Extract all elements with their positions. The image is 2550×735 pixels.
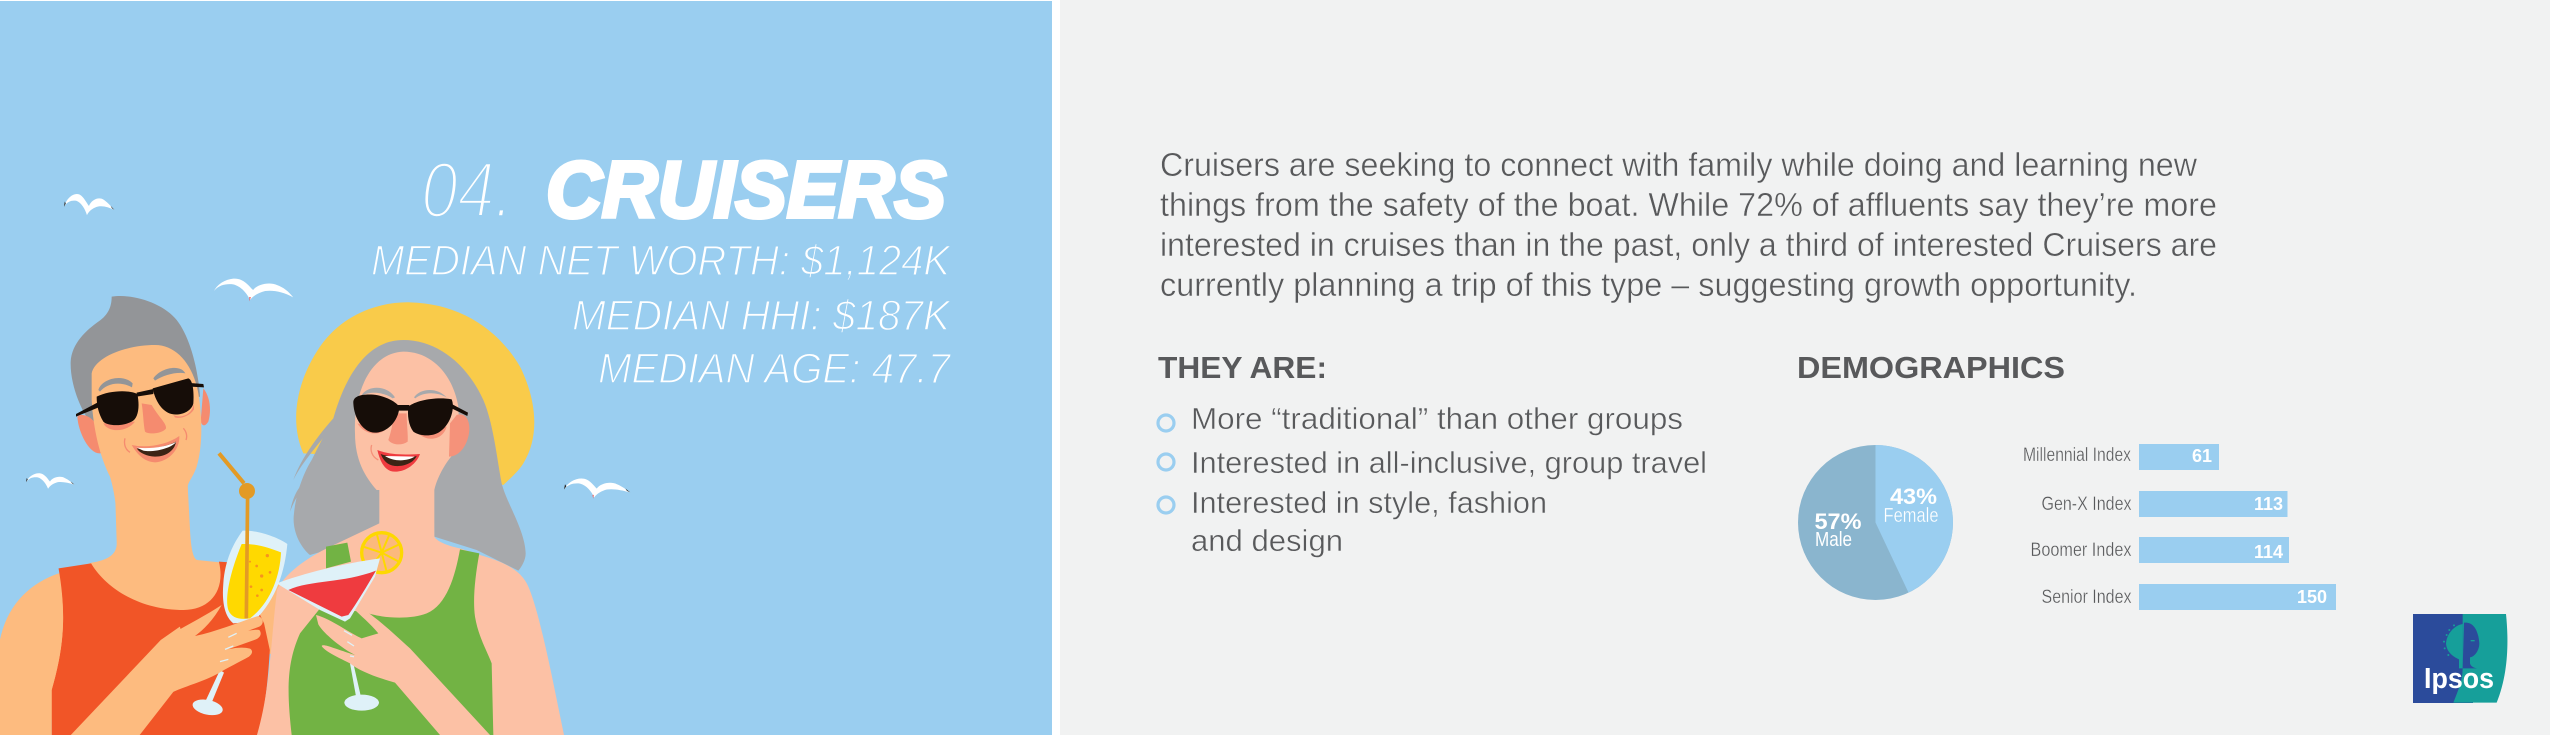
bullet list [1158, 401, 1707, 558]
smile [132, 436, 179, 462]
bar chart: generation index: 113 [2254, 494, 2283, 514]
sunglasses [76, 378, 204, 425]
hair [71, 296, 200, 427]
martini stem [350, 663, 362, 700]
nose [142, 403, 166, 433]
intro paragraph: Cruisers are seeking to connect with family while doing and learning new [1160, 147, 2198, 184]
median statistics: MEDIAN NET WORTH: $1,124K [371, 237, 952, 285]
bar chart: generation index: 150 [2297, 587, 2327, 607]
panel: cruisers illustration [0, 1, 1052, 735]
pie chart: gender: Female [1884, 505, 1938, 527]
bubbles [249, 554, 271, 597]
straw [246, 490, 248, 618]
flute glass [223, 531, 287, 623]
man hand [170, 605, 263, 693]
glasses shadow [357, 423, 447, 439]
median statistics: MEDIAN AGE: 47.7 [598, 345, 952, 393]
intro paragraph: interested in cruises than in the past, only a third of interested Cruisers are [1160, 227, 2217, 264]
hat [296, 302, 534, 485]
intro paragraph [1160, 147, 2217, 304]
eyebrows [98, 368, 185, 392]
orange tank top [52, 562, 270, 735]
illustration: woman with hat and martini [257, 302, 564, 735]
bar chart: generation index: Boomer Index [2030, 540, 2132, 561]
bar chart: generation index: Millennial Index [2023, 445, 2131, 466]
logo: Ipsos [2413, 614, 2507, 703]
nose [388, 413, 408, 444]
lemon slice [362, 533, 402, 573]
cocktail straw top [219, 453, 244, 483]
logo: Ipsos: Ipsos [2424, 663, 2494, 695]
man skin torso [0, 483, 283, 735]
pie chart: gender [1798, 445, 1953, 600]
champagne [227, 544, 281, 619]
illustration: champagne flute and hand [170, 490, 287, 718]
median statistics: MEDIAN HHI: $187K [572, 292, 952, 340]
icon: seagull right [564, 478, 630, 499]
straw knob [239, 483, 255, 499]
title: CRUISERS [546, 145, 946, 234]
bullet list: and design [1191, 523, 1343, 558]
illustration: man body [0, 483, 283, 735]
flute stem [206, 670, 224, 703]
glasses shadow [103, 403, 194, 430]
panel: description [1060, 0, 2550, 735]
icon: seagull top left [64, 194, 114, 215]
man arm [71, 627, 195, 735]
green tank top [289, 543, 493, 735]
sunglasses [353, 395, 468, 435]
bar chart: generation index: 114 [2254, 542, 2283, 562]
bullet list: Interested in style, fashion [1191, 485, 1547, 520]
bar chart: generation index: 61 [2192, 446, 2212, 466]
icon: seagull lower left [26, 473, 75, 489]
bar chart: generation index [2023, 444, 2336, 610]
title: 04. [421, 145, 513, 234]
bullet list: Interested in all-inclusive, group travel [1191, 445, 1707, 480]
icon: seagull centre [214, 279, 293, 301]
ears [77, 388, 210, 453]
mouth [377, 450, 420, 472]
intro paragraph: currently planning a trip of this type – suggesting growth opportunity. [1160, 267, 2137, 304]
man shoulder [0, 573, 63, 735]
bullet list: More “traditional” than other groups [1191, 401, 1683, 436]
bar chart: generation index: Senior Index [2042, 587, 2132, 608]
eyebrows [362, 388, 447, 398]
heading: they are: THEY ARE: [1158, 350, 1327, 385]
body skin [257, 352, 564, 735]
pie chart: gender: 57% [1814, 509, 1862, 534]
heading: demographics: DEMOGRAPHICS [1797, 350, 2065, 385]
hair wisps [290, 418, 333, 512]
martini drink [288, 571, 376, 617]
face and neck [92, 345, 201, 532]
pie chart: gender: Male [1815, 529, 1852, 551]
pie chart: gender: 43% [1890, 484, 1937, 509]
ear [449, 414, 469, 457]
bar chart: generation index: Gen-X Index [2042, 494, 2132, 515]
median statistics [371, 237, 952, 393]
martini glass [277, 558, 380, 622]
hair [294, 340, 526, 571]
intro paragraph: things from the safety of the boat. While 72% of affluents say they’re more [1160, 187, 2217, 224]
illustration: man head [71, 296, 244, 532]
hand and arm [316, 610, 490, 735]
